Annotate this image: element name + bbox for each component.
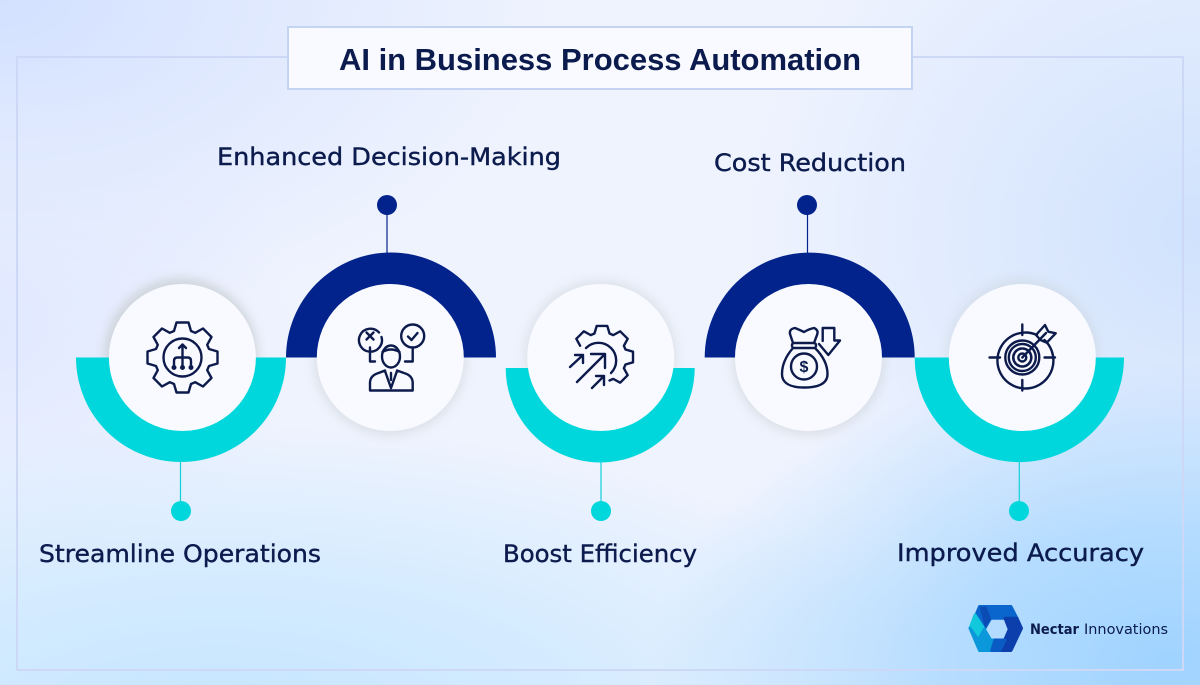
stem: [386, 205, 388, 255]
dot: [591, 501, 611, 521]
white circle: [949, 284, 1096, 431]
title box: [288, 27, 912, 89]
icon: target with dart: [990, 324, 1056, 390]
white circle: [735, 284, 882, 431]
dot: [1009, 501, 1029, 521]
logo: Nectar Innovations: [970, 606, 1168, 650]
label: Streamline Operations: [39, 540, 321, 568]
title: AI in Business Process Automation: [339, 42, 861, 77]
teal half ring: [506, 368, 695, 462]
step: Enhanced Decision-Making: [217, 143, 561, 436]
step: Streamline Operations: [39, 278, 321, 568]
stem: [180, 460, 182, 511]
label: Enhanced Decision-Making: [217, 143, 561, 171]
logo mark: [970, 606, 1022, 650]
icon: gear with rising arrows: [570, 326, 633, 388]
icon: person deciding: [359, 324, 424, 390]
label: Cost Reduction: [714, 149, 906, 177]
icon: gear with hierarchy: [148, 322, 218, 392]
white circle: [109, 284, 256, 431]
logo wordmark: Innovations: [1084, 622, 1168, 638]
step: Boost Efficiency: [503, 279, 697, 568]
dot: [171, 501, 191, 521]
white circle: [527, 284, 674, 431]
dot: [377, 195, 397, 215]
stem: [806, 205, 808, 255]
icon: money bag with down arrow: [782, 328, 840, 388]
label: Improved Accuracy: [897, 539, 1144, 567]
white circle: [317, 284, 464, 431]
logo wordmark: Nectar: [1030, 622, 1080, 638]
step: Improved Accuracy: [897, 278, 1144, 567]
step: Cost Reduction: [705, 149, 915, 436]
dollar sign: $: [800, 359, 809, 376]
stem: [600, 460, 602, 511]
navy half ring: [705, 253, 915, 358]
label: Boost Efficiency: [503, 540, 697, 568]
dot: [797, 195, 817, 215]
teal half ring: [76, 358, 286, 462]
navy half ring: [286, 253, 496, 358]
teal half ring: [915, 358, 1124, 462]
stem: [1018, 460, 1020, 511]
